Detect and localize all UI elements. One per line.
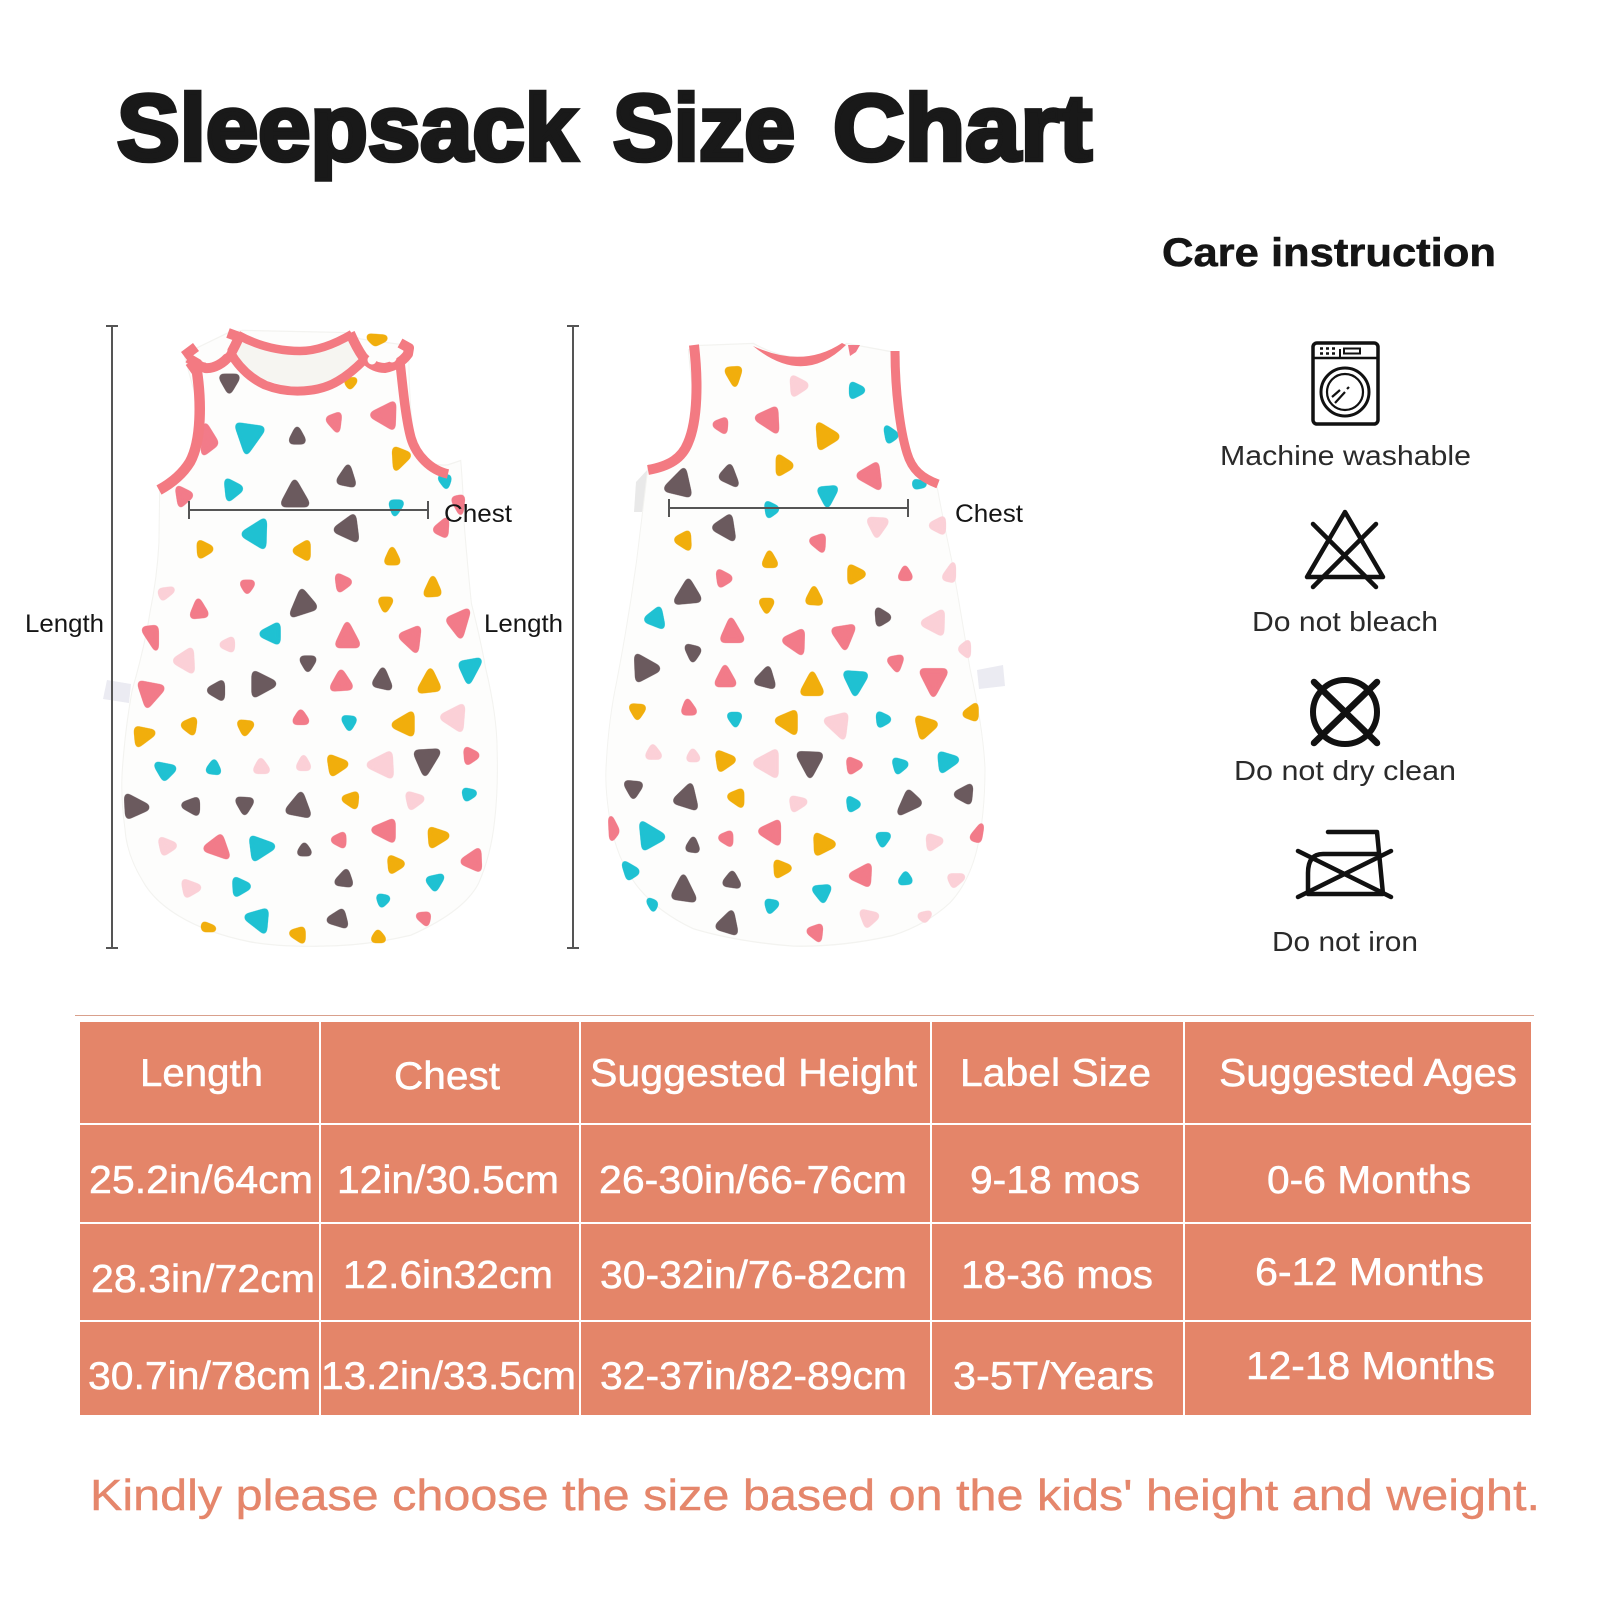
title: Size: [613, 75, 795, 180]
icon: do not dry clean: [1313, 680, 1377, 744]
label: back length: Length: [484, 610, 563, 638]
care tag: [103, 680, 131, 703]
table row 3: 30.7in/78cm: [88, 1355, 311, 1398]
table row 3: 32-37in/82-89cm: [600, 1355, 907, 1398]
panel: back view of sleepsack: [606, 343, 1005, 946]
triangle print: [611, 369, 982, 940]
fabric body: [606, 343, 985, 946]
table header row: Chest: [394, 1055, 500, 1098]
table row 2: 28.3in/72cm: [91, 1258, 315, 1301]
measure: back length bracket: [567, 326, 579, 948]
table row 1: 9-18 mos: [970, 1159, 1140, 1202]
title: Chart: [833, 75, 1092, 180]
panel: front view of sleepsack: [103, 330, 497, 946]
table row 3: 3-5T/Years: [953, 1355, 1154, 1398]
table row 2: 6-12 Months: [1255, 1251, 1484, 1294]
fabric and print: [606, 343, 985, 946]
table row 3: 12-18 Months: [1246, 1345, 1495, 1388]
text: do not dry clean: Do not dry clean: [1234, 755, 1456, 786]
icon: do not bleach: [1307, 512, 1383, 587]
table row 2: [91, 1251, 1484, 1301]
coral binding trim: [159, 333, 448, 490]
table cell backgrounds: [80, 1022, 1531, 1415]
neck opening: [232, 338, 365, 390]
table row 1: 25.2in/64cm: [89, 1159, 313, 1202]
coral binding trim: [648, 343, 938, 484]
text: do not bleach: Do not bleach: [1252, 606, 1438, 637]
footer note: Kindly please choose the size based on the kids' height and weight.: [90, 1471, 1540, 1520]
title: Sleepsack: [117, 75, 578, 180]
label: back chest: Chest: [955, 500, 1023, 528]
icon: machine washable: [1313, 343, 1378, 424]
text: machine washable: Machine washable: [1220, 440, 1471, 471]
heading: care instruction: Care instruction: [1162, 231, 1496, 275]
table row 3: 13.2in/33.5cm: [321, 1355, 576, 1398]
table header row: [140, 1052, 1517, 1098]
measure: front length bracket: [106, 326, 118, 948]
table header row: Length: [140, 1052, 263, 1095]
measure: front chest bracket: [189, 501, 428, 519]
table row 1: [89, 1159, 1471, 1202]
text: do not iron: Do not iron: [1272, 926, 1418, 957]
table row 3: [88, 1345, 1495, 1398]
table row 1: 12in/30.5cm: [337, 1159, 559, 1202]
shoulder snap buttons: [200, 346, 396, 364]
care tag: [977, 665, 1005, 689]
table header row: Label Size: [960, 1052, 1151, 1095]
label: front chest: Chest: [444, 500, 512, 528]
icon: do not iron: [1298, 832, 1391, 897]
label: front length: Length: [25, 610, 104, 638]
table header row: Suggested Height: [590, 1052, 917, 1095]
triangle print: [127, 337, 480, 941]
table row 2: 30-32in/76-82cm: [600, 1254, 907, 1297]
table header row: Suggested Ages: [1219, 1052, 1517, 1095]
table row 2: 12.6in32cm: [343, 1254, 553, 1297]
divider above table: [75, 1015, 1534, 1016]
table row 1: 0-6 Months: [1267, 1159, 1471, 1202]
title: [117, 75, 1092, 180]
fabric body: [122, 330, 497, 946]
measure: back chest bracket: [669, 499, 908, 517]
zipper pull: [634, 468, 649, 512]
table: size chart: [80, 1022, 1531, 1415]
table row 1: 26-30in/66-76cm: [599, 1159, 907, 1202]
fabric and print: [122, 330, 497, 946]
table row 2: 18-36 mos: [961, 1254, 1153, 1297]
